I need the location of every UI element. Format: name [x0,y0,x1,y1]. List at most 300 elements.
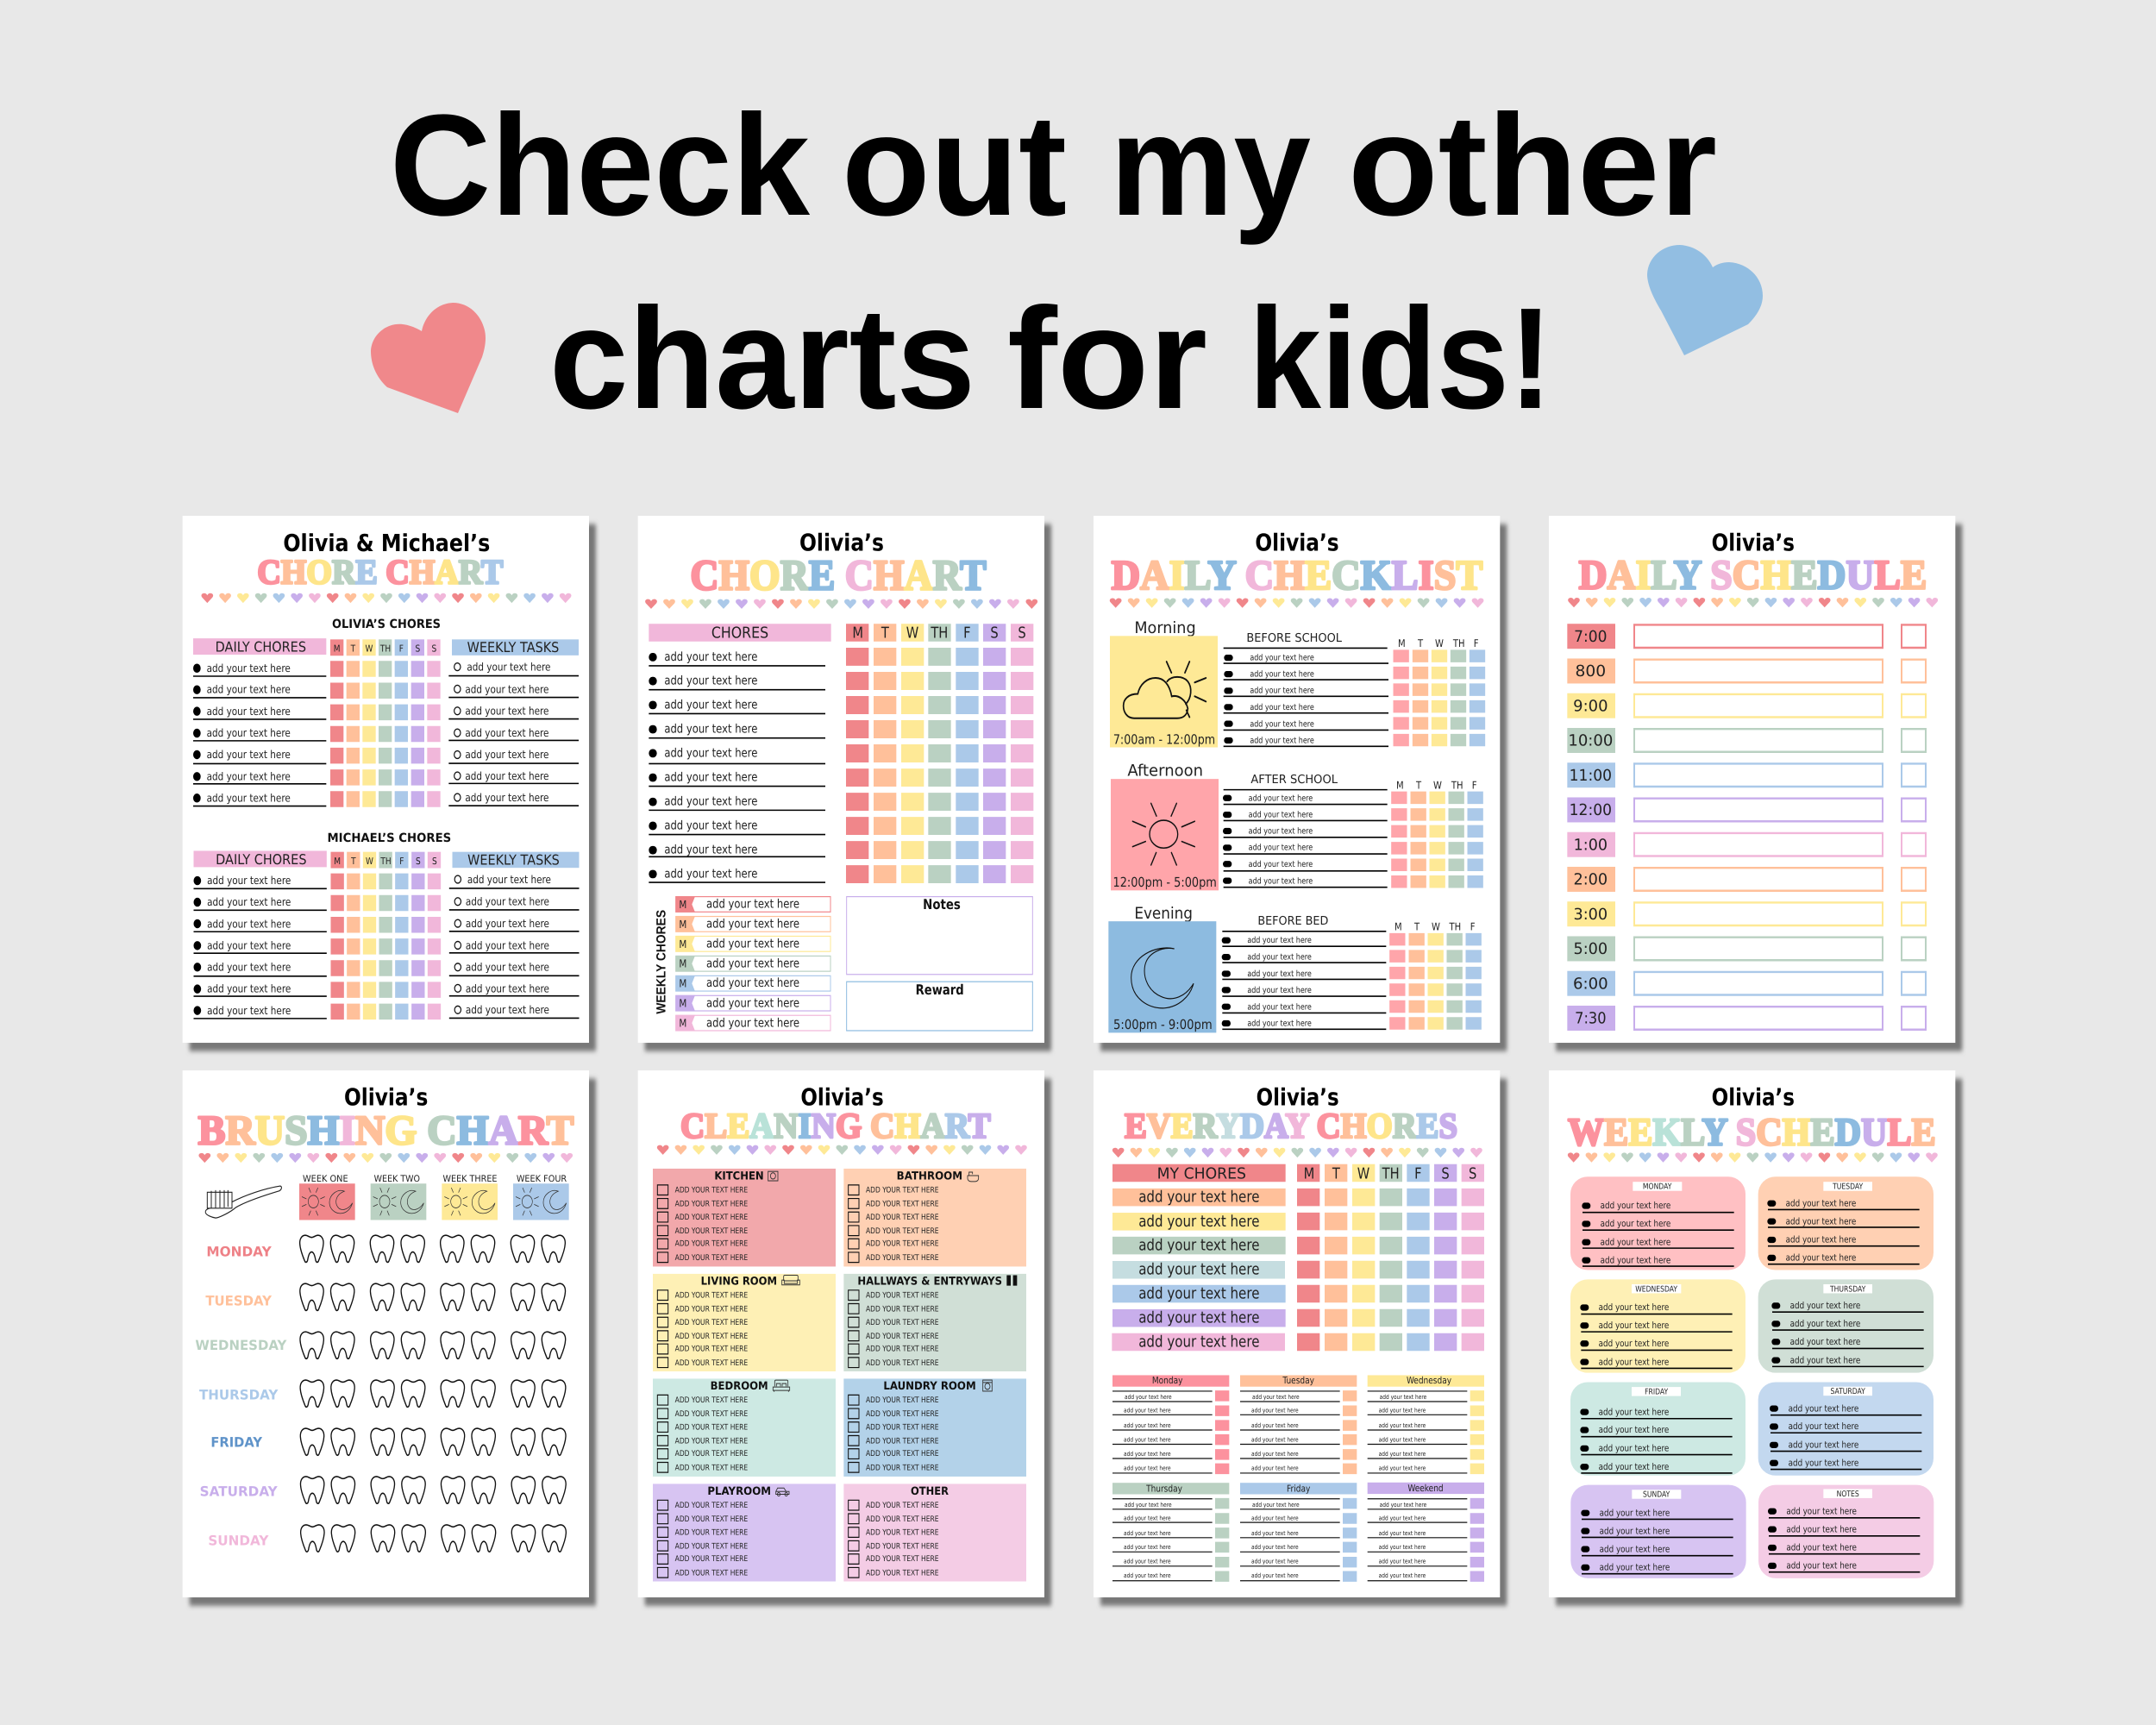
day labels: SATURDAY [200,1484,278,1500]
morning block: add your text here [1250,719,1314,729]
morning block: add your text here [1250,669,1314,679]
day headers: F [963,624,971,642]
title: for [1007,279,1207,439]
chores header: CHORES [711,624,768,642]
card: Tuesday: add your text here [1786,1252,1856,1263]
section: laundry room: ADD YOUR TEXT HERE [866,1423,939,1432]
section: other: ADD YOUR TEXT HERE [866,1528,939,1537]
time cells [1567,624,1615,1031]
page name: Olivia’s [1712,529,1795,556]
afternoon block: Afternoon [1127,761,1203,780]
day headers: M [852,624,863,642]
schedule boxes [1634,624,1926,1030]
chart title: CHORE CHART [257,553,503,591]
section: playroom: ADD YOUR TEXT HERE [675,1541,748,1551]
weekly chores rows: add your text here [706,976,799,990]
section: Michael's chores: W [366,856,373,867]
time cells: 1:00 [1574,835,1608,854]
chart title: DAILY SCHEDULE [1579,552,1927,598]
heart row [645,599,1037,609]
evening block: W [1432,921,1440,933]
tracking grid [857,648,1022,884]
evening block: T [1414,921,1420,933]
section: hallways and entryways: ADD YOUR TEXT HERE [866,1318,939,1327]
block: Thursday: add your text here [1124,1515,1171,1521]
page name: Olivia’s [1255,529,1339,556]
section: Olivia's chores: S [415,643,420,654]
section: bathroom: ADD YOUR TEXT HERE [866,1239,939,1248]
afternoon block: add your text here [1249,859,1313,869]
section: Michael's chores: add your text here [466,1004,549,1016]
page name: Olivia’s [799,529,884,556]
section: bedroom: ADD YOUR TEXT HERE [675,1436,748,1446]
chart title: CHORE CHART [690,551,987,599]
weekly chores rows: add your text here [706,897,799,911]
block: Wednesday: Wednesday [1407,1375,1451,1386]
weekly chores rows: M [679,957,686,970]
chores header [649,624,831,642]
section: Olivia's chores: WEEKLY TASKS [467,640,559,656]
section: Olivia's chores: add your text here [207,749,291,761]
day headers: TH [931,624,948,642]
weekly chores rows: add your text here [706,937,799,950]
block: Wednesday: add your text here [1379,1465,1426,1471]
chore rows: add your text here [664,674,757,687]
panel: everyday chores [1094,1070,1507,1606]
section: Olivia's chores: add your text here [207,727,291,739]
section: Olivia's chores: W [366,643,373,654]
block: Wednesday: add your text here [1379,1451,1426,1458]
weekly chores rows: M [679,997,686,1010]
morning block: add your text here [1250,736,1314,745]
section: Michael's chores: DAILY CHORES [216,851,306,868]
time cells: 3:00 [1573,905,1608,923]
chart title: CLEANING CHART [680,1106,991,1145]
card: Sunday: add your text here [1600,1562,1670,1572]
reward box: Reward [916,982,964,998]
block: Wednesday: add your text here [1380,1394,1426,1401]
time cells: 6:00 [1573,974,1608,993]
weekly chores rows: M [679,899,686,911]
section: Olivia's chores: add your text here [465,683,548,696]
afternoon block: add your text here [1249,875,1313,886]
section: Michael's chores: S [432,856,437,867]
time cells: 7:30 [1575,1009,1606,1027]
chore bars [1112,1164,1286,1351]
tracking grid [1308,1189,1473,1352]
card: Sunday [1570,1485,1746,1578]
day headers: F [1414,1165,1422,1182]
section: Olivia's chores: add your text here [465,705,548,718]
chore bars: add your text here [1138,1260,1259,1278]
chore bars: add your text here [1138,1236,1259,1254]
chore bars: add your text here [1138,1212,1259,1230]
afternoon block: 12:00pm - 5:00pm [1112,875,1217,890]
icon: moon [1131,948,1194,1008]
week headers: WEEK TWO [374,1174,420,1184]
card: Monday: add your text here [1601,1255,1670,1265]
day headers: S [1018,624,1026,642]
heart row [1110,598,1483,608]
card: Thursday: add your text here [1790,1355,1860,1365]
section: hallways and entryways: ADD YOUR TEXT HERE [866,1332,939,1340]
section: playroom: ADD YOUR TEXT HERE [675,1554,748,1564]
weekly chores rows: M [679,919,686,931]
card: Notes: add your text here [1786,1524,1857,1534]
chore rows: add your text here [664,649,757,664]
title: my [1110,85,1311,246]
card: Friday: add your text here [1599,1425,1669,1435]
day headers [846,624,1033,642]
card: Sunday: add your text here [1600,1508,1670,1518]
page name: Olivia’s [800,1083,884,1111]
section: laundry room [843,1378,1026,1477]
evening block: Evening [1134,904,1193,922]
time cells: 11:00 [1570,766,1612,784]
block: Thursday: Thursday [1146,1484,1182,1494]
heart row [1568,598,1938,607]
card: Wednesday [1570,1279,1745,1373]
chore rows: add your text here [664,698,757,712]
section: other: ADD YOUR TEXT HERE [866,1568,939,1578]
day headers: S [990,624,999,642]
card: Wednesday: add your text here [1599,1302,1669,1313]
block: Friday: add your text here [1251,1572,1299,1579]
card: Saturday: add your text here [1789,1440,1858,1450]
chore bars: add your text here [1138,1188,1259,1206]
section: bedroom: ADD YOUR TEXT HERE [675,1423,748,1432]
evening block: 5:00pm - 9:00pm [1113,1017,1213,1032]
section: Michael's chores: add your text here [466,939,549,952]
block: Weekend: add your text here [1379,1559,1426,1565]
section: hallways and entryways: ADD YOUR TEXT HERE [866,1358,939,1367]
panel: daily checklist [1094,516,1507,1051]
weekly chores rows: M [679,938,686,950]
block: Thursday: add your text here [1124,1530,1171,1537]
day headers: T [1332,1165,1340,1182]
afternoon block: AFTER SCHOOL [1250,772,1338,787]
icon: cloud and sun [1124,662,1206,718]
block: Tuesday: add your text here [1251,1465,1299,1471]
section: living room: ADD YOUR TEXT HERE [675,1291,748,1300]
evening block: add your text here [1247,1002,1312,1012]
section: Olivia's chores: add your text here [207,770,291,783]
afternoon block: TH [1451,780,1463,792]
section: Michael's chores: add your text here [207,982,291,995]
section: laundry room: ADD YOUR TEXT HERE [866,1409,939,1418]
evening block [1108,904,1476,1032]
page name: Olivia’s [1257,1083,1339,1111]
section: bedroom: ADD YOUR TEXT HERE [675,1449,748,1458]
block: Friday: Friday [1287,1484,1310,1494]
card: Monday: MONDAY [1643,1182,1672,1191]
icon: blue heart [1647,245,1763,355]
morning block [1110,618,1479,748]
card: Thursday: THURSDAY [1830,1284,1866,1294]
block: Weekend: add your text here [1380,1502,1426,1509]
morning block: BEFORE SCHOOL [1246,630,1342,644]
card: Monday: add your text here [1601,1219,1670,1229]
weekly chores rows: M [679,977,686,990]
icon: toothbrush [205,1186,281,1218]
card: Sunday: SUNDAY [1643,1490,1670,1499]
block: Friday: add your text here [1251,1530,1299,1537]
section: hallways and entryways: ADD YOUR TEXT HERE [866,1345,939,1353]
card: Notes: add your text here [1786,1542,1857,1553]
section: Michael's chores: add your text here [466,895,549,908]
block: Wednesday: add your text here [1379,1422,1426,1429]
section: kitchen: ADD YOUR TEXT HERE [675,1239,748,1248]
panel: daily schedule [1549,516,1962,1051]
section: Olivia's chores: DAILY CHORES [216,639,306,655]
title: out [842,85,1067,246]
weekly chores label: WEEKLY CHORES [654,910,668,1014]
tooth grid [300,1235,566,1552]
card: Friday: add your text here [1599,1407,1669,1417]
chore bars: add your text here [1138,1308,1259,1327]
page name: Olivia’s [1712,1083,1795,1111]
panel: cleaning chart [638,1070,1051,1606]
block: Weekend [1368,1483,1484,1582]
time cells: 12:00 [1570,800,1612,819]
block: Thursday [1112,1483,1229,1582]
card: Notes [1758,1485,1934,1578]
weekly chores rows: add your text here [706,996,799,1010]
section: bedroom [653,1378,836,1477]
chore bars: add your text here [1138,1284,1259,1302]
morning block: T [1418,637,1423,649]
card: Friday: FRIDAY [1645,1388,1669,1396]
card: Thursday: add your text here [1790,1301,1860,1311]
block: Friday: add your text here [1251,1544,1299,1551]
block: Thursday: add your text here [1124,1559,1171,1565]
block: Monday: add your text here [1125,1394,1172,1401]
section: hallways and entryways [843,1274,1026,1371]
card: Tuesday [1758,1176,1934,1270]
section: living room: ADD YOUR TEXT HERE [675,1332,748,1340]
card: Tuesday: add your text here [1786,1234,1856,1245]
block: Thursday: add your text here [1125,1502,1172,1509]
title: charts [549,279,975,439]
week headers: WEEK FOUR [517,1174,567,1184]
card: Thursday: add your text here [1790,1319,1860,1329]
card: Monday [1570,1176,1745,1270]
section: Olivia's chores: add your text here [207,792,291,805]
day labels [195,1244,287,1549]
section: playroom: ADD YOUR TEXT HERE [675,1515,748,1523]
card: Thursday [1758,1279,1934,1373]
block: Weekend: add your text here [1379,1572,1426,1579]
section: Michael's chores: add your text here [467,874,551,886]
section: Michael's chores: add your text here [207,875,291,887]
section: kitchen: ADD YOUR TEXT HERE [675,1226,748,1235]
block: Thursday: add your text here [1124,1572,1171,1579]
morning block: 7:00am - 12:00pm [1113,731,1215,747]
block: Tuesday: add your text here [1252,1394,1300,1401]
time cells: 5:00 [1573,939,1608,957]
chore rows: add your text here [664,867,757,881]
section: Michael's chores: MICHAEL’S CHORES [327,831,451,845]
card: Wednesday: add your text here [1599,1339,1669,1349]
section: Michael's chores: add your text here [207,1005,291,1017]
afternoon block [1111,761,1477,890]
section: Michael's chores: M [334,856,341,867]
card: Saturday: add your text here [1789,1458,1858,1468]
heart row [1568,1152,1938,1163]
block: Monday: add your text here [1124,1407,1171,1414]
section: hallways and entryways: HALLWAYS & ENTRYWAYS [857,1274,1002,1288]
title: other [1348,85,1717,246]
chore rows: add your text here [664,722,757,736]
block: Tuesday: add your text here [1251,1451,1299,1458]
morning block: W [1435,637,1444,649]
day labels: MONDAY [206,1244,272,1259]
section: living room: ADD YOUR TEXT HERE [675,1345,748,1353]
section: Olivia's chores: M [334,643,341,654]
section: Michael's chores: add your text here [466,961,549,974]
time cells: 2:00 [1573,870,1608,888]
block: Friday: add your text here [1252,1502,1300,1509]
section: other [843,1484,1026,1582]
afternoon block: F [1472,780,1477,792]
section: Olivia's chores: add your text here [207,662,291,674]
block: Friday: add your text here [1251,1515,1299,1521]
block: Wednesday [1368,1375,1484,1474]
chore bars: add your text here [1138,1333,1259,1351]
block: Friday: add your text here [1251,1559,1299,1565]
section: Olivia's chores: add your text here [465,792,548,804]
chore rows: add your text here [664,746,757,760]
title: Check [390,85,811,246]
section: Olivia's chores: add your text here [465,770,548,782]
evening block: TH [1449,921,1461,933]
day labels: TUESDAY [205,1293,272,1309]
chore rows: add your text here [664,770,757,784]
section: laundry room: ADD YOUR TEXT HERE [866,1436,939,1446]
section: Olivia's chores: add your text here [467,661,550,674]
section: bedroom: ADD YOUR TEXT HERE [675,1396,748,1405]
section: other: ADD YOUR TEXT HERE [866,1515,939,1523]
section: living room: ADD YOUR TEXT HERE [675,1318,748,1327]
day labels: THURSDAY [199,1388,279,1403]
section: playroom: PLAYROOM [707,1484,771,1497]
page name: Olivia & Michael’s [283,530,490,557]
morning block: TH [1453,637,1464,649]
section: playroom: ADD YOUR TEXT HERE [675,1568,748,1578]
chart title: BRUSHING CHART [198,1107,573,1153]
day labels: FRIDAY [210,1434,262,1450]
section: Michael's chores: add your text here [466,918,549,930]
block: Monday: add your text here [1124,1451,1171,1458]
block: Tuesday: add your text here [1251,1407,1299,1414]
card: Tuesday: TUESDAY [1833,1182,1864,1191]
card: Sunday: add your text here [1600,1544,1670,1554]
section: Michael's chores: T [351,856,356,867]
day headers: W [1357,1165,1369,1182]
section: hallways and entryways: ADD YOUR TEXT HERE [866,1291,939,1300]
card: Notes: add your text here [1786,1560,1857,1571]
chore rows: add your text here [664,819,757,832]
reward box [847,982,1032,1031]
heart row [657,1145,1027,1155]
afternoon block: T [1416,780,1421,792]
section: bathroom: ADD YOUR TEXT HERE [866,1253,939,1262]
heart row [198,1153,573,1163]
day headers: T [881,624,889,642]
afternoon block: add your text here [1249,810,1313,819]
afternoon block: W [1433,780,1442,792]
chart title: DAILY CHECKLIST [1112,552,1482,599]
section: hallways and entryways: ADD YOUR TEXT HERE [866,1304,939,1314]
section: living room: ADD YOUR TEXT HERE [675,1358,748,1367]
section: Michael's chores: add your text here [207,961,291,974]
block: Weekend: add your text here [1379,1544,1426,1551]
section: Michael's chores [193,831,579,1019]
title [390,85,1717,439]
section: Olivia's chores: add your text here [207,683,291,696]
block: Weekend: Weekend [1407,1483,1444,1494]
card: Thursday: add your text here [1790,1337,1860,1347]
section: laundry room: ADD YOUR TEXT HERE [866,1463,939,1472]
block: Monday: Monday [1152,1375,1182,1386]
morning block: add your text here [1250,686,1314,695]
section: laundry room: LAUNDRY ROOM [883,1379,976,1392]
card: Tuesday: add your text here [1786,1216,1856,1226]
card: Saturday: add your text here [1789,1421,1858,1432]
block: Tuesday: add your text here [1251,1436,1299,1443]
afternoon block: M [1396,780,1404,792]
section: Michael's chores: add your text here [207,939,291,952]
section: Michael's chores: TH [380,856,392,867]
section: bathroom: ADD YOUR TEXT HERE [866,1226,939,1235]
section: other: OTHER [911,1484,949,1497]
section: bathroom: ADD YOUR TEXT HERE [866,1199,939,1208]
chart title: EVERYDAY CHORES [1125,1106,1457,1145]
evening block: add your text here [1247,952,1312,962]
block: Tuesday: add your text here [1251,1422,1299,1429]
afternoon block: add your text here [1249,843,1313,852]
morning block: add your text here [1250,702,1314,712]
morning block: F [1474,637,1479,649]
block: Thursday: add your text here [1124,1544,1171,1551]
card: Saturday: add your text here [1789,1403,1858,1414]
section: Michael's chores: WEEKLY TASKS [467,852,560,869]
weekly chores rows: add your text here [706,957,799,970]
section: Olivia's chores: OLIVIA’S CHORES [332,618,441,631]
day labels: SUNDAY [208,1534,269,1549]
section: laundry room: ADD YOUR TEXT HERE [866,1449,939,1458]
chore rows: add your text here [664,843,757,856]
section: bedroom: ADD YOUR TEXT HERE [675,1463,748,1472]
section: Olivia's chores: TH [380,643,391,654]
block: Tuesday [1240,1375,1357,1474]
section: bathroom: ADD YOUR TEXT HERE [866,1213,939,1222]
section: other: ADD YOUR TEXT HERE [866,1554,939,1564]
page name: Olivia’s [344,1083,428,1111]
section: kitchen [653,1169,836,1266]
section: kitchen: KITCHEN [714,1169,764,1182]
evening block: add your text here [1247,985,1312,995]
section: Olivia's chores: T [350,643,355,654]
day headers: S [1441,1165,1450,1182]
block: Weekend: add your text here [1379,1530,1426,1537]
card: Sunday: add your text here [1600,1526,1670,1536]
weekly chores rows: add your text here [706,917,799,931]
heart row [1112,1148,1482,1157]
section: bathroom: BATHROOM [897,1169,962,1182]
section: kitchen: ADD YOUR TEXT HERE [675,1186,748,1195]
card: Friday: add your text here [1599,1443,1669,1453]
